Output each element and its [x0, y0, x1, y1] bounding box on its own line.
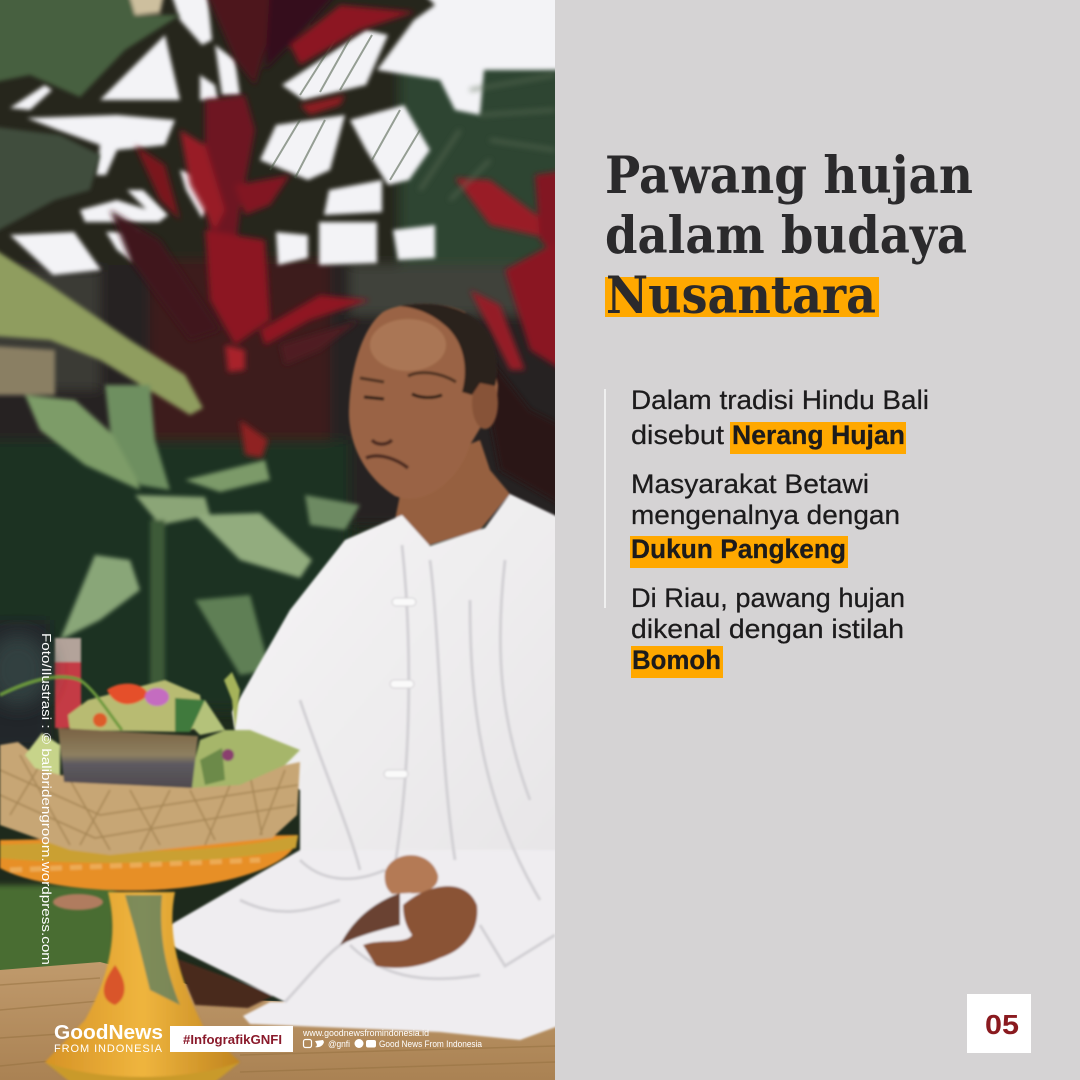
upper hand thumb: [385, 855, 438, 894]
small stalk: [224, 672, 240, 730]
title: Nusantara: [606, 266, 876, 326]
brows: [360, 373, 456, 382]
face and head: [349, 304, 498, 499]
woven basket: [0, 742, 300, 855]
red plant foliage: [110, 0, 570, 510]
footer website and social handles: Good News From Indonesia: [379, 1039, 482, 1049]
incense holder: [55, 638, 81, 728]
list: Hindu Bali: Dalam tradisi Hindu Bali: [631, 385, 929, 415]
man in white robe: [170, 304, 575, 1040]
list: Betawi: Masyarakat Betawi: [631, 469, 869, 499]
robe folds: [240, 545, 555, 1002]
clay pot: [58, 728, 198, 788]
footer logo: GoodNews from Indonesia: [54, 1022, 163, 1055]
forehead highlight: [370, 319, 446, 371]
list: Betawi: Dukun Pangkeng: [631, 534, 846, 564]
leaf offerings and flowers: [188, 730, 300, 788]
large tropical leaves: [0, 0, 360, 690]
offering stand and basket: [0, 634, 300, 1080]
hashtag badge: [170, 1026, 293, 1052]
footer website and social handles: www.goodnewsfromindonesia.id: [302, 1028, 429, 1038]
neck: [395, 440, 510, 548]
footer website and social handles: @gnfi: [328, 1039, 350, 1049]
list: Hindu Bali: disebut: [631, 420, 725, 450]
photo credit: Foto/Ilustrasi : © balibridengroom.wordpress.com: [39, 633, 53, 965]
sky patches through foliage: [10, 0, 570, 275]
list: Betawi: [630, 469, 900, 568]
grass and wooden floor: [0, 885, 575, 1080]
frond stripes over sky: [270, 35, 420, 180]
brown leg: [175, 958, 275, 1008]
photo: man meditating with offering: [0, 0, 580, 1080]
robe toggle buttons: [386, 598, 414, 778]
list: Riau: Di Riau, pawang hujan: [631, 583, 905, 613]
list: Betawi: mengenalnya dengan: [631, 500, 900, 530]
palm fronds at right: [420, 75, 555, 200]
ear: [472, 377, 498, 429]
page number: [967, 994, 1031, 1053]
hair: [400, 304, 497, 395]
vertical divider: [604, 389, 606, 608]
list: Hindu Bali: [631, 385, 929, 454]
lap and trousers: [170, 850, 575, 1040]
footer logo: GoodNews from Indonesia: GoodNews: [54, 1022, 163, 1044]
photo background garden: [0, 0, 580, 1080]
lower hand: [363, 886, 477, 968]
footer website and social handles: [302, 1028, 482, 1049]
title: [605, 146, 973, 326]
footer logo: GoodNews from Indonesia: FROM INDONESIA: [54, 1043, 163, 1055]
wrist slit: [340, 893, 400, 945]
title: Pawang hujan: [605, 146, 973, 206]
closed eyes: [364, 394, 442, 399]
hand under dish: [53, 894, 103, 910]
list: Riau: dikenal dengan istilah: [631, 614, 904, 644]
hashtag badge: #InfografikGNFI: [183, 1032, 282, 1047]
nose and mouth: [366, 440, 408, 468]
list: Riau: Bomoh: [632, 645, 721, 675]
list: Hindu Bali: Nerang Hujan: [732, 420, 905, 450]
smoke: [0, 634, 50, 706]
page number: 05: [985, 1009, 1019, 1040]
right panel: [555, 0, 1080, 1080]
pedestal dish: [0, 835, 298, 891]
title: dalam budaya: [605, 206, 967, 266]
robe upper body: [230, 492, 555, 852]
list: Riau: [631, 583, 905, 678]
pedestal stem: [45, 892, 240, 1080]
